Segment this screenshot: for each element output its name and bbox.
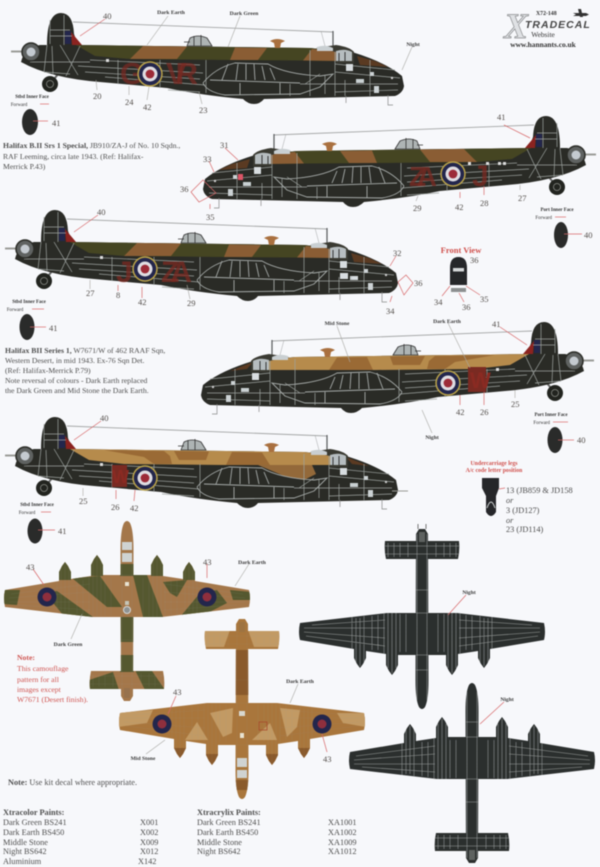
front view diagram: 36 — [462, 302, 470, 312]
callouts for aircraft 4: Mid Stone — [325, 321, 350, 327]
decal detail: port inner face, aircraft 4: Forward — [533, 421, 551, 426]
callouts for aircraft 4: 25 — [511, 399, 520, 409]
aircraft 2: side view, nose left — [203, 116, 596, 208]
callouts for aircraft 5: 25 — [79, 496, 88, 506]
logo: Xtradecal product mark: www.hannants.co.uk — [510, 40, 577, 49]
red note: camouflage pattern: images except — [17, 685, 62, 694]
paint list: Xtracrylix: XA1009 — [328, 838, 357, 847]
caption: Halifax BII Series 1 — [5, 346, 165, 395]
callouts for aircraft 3: 27 — [86, 288, 94, 298]
paint list: Xtracrylix: Dark Earth BS450 — [197, 828, 258, 837]
aircraft 3: side view, nose right: J — [116, 256, 133, 289]
callouts for aircraft 1 — [80, 10, 420, 115]
plan view C: undersurfaces, night — [299, 524, 545, 709]
callouts for aircraft 2: 42 — [455, 202, 464, 212]
red note: camouflage pattern: This camouflage — [17, 664, 69, 673]
front view diagram: 35 — [480, 294, 488, 304]
aircraft 2: side view, nose left: J — [472, 160, 489, 193]
paint list: Xtracrylix: XA1002 — [328, 828, 357, 837]
aircraft 2: side view, nose left: ZA — [409, 161, 437, 192]
paint list: Xtracrylix — [197, 808, 357, 856]
decal detail: port inner face, aircraft 2: Port Inner Face — [540, 208, 574, 213]
note: kit decal: Note: Use kit decal where appropriate. — [8, 778, 137, 787]
callouts for aircraft 3 — [74, 207, 422, 316]
plan view B callouts: 43 — [173, 687, 182, 697]
callouts for aircraft 3: 36 — [414, 278, 422, 288]
decal detail: port inner face, aircraft 2: Forward — [535, 216, 553, 221]
logo: Xtradecal product mark: TRADECAL — [525, 19, 591, 31]
decal detail: starboard inner face, aircraft 3: Stbd Inner Face — [12, 300, 47, 305]
undercarriage legs note: 13 (JB859 & JD158 — [506, 486, 573, 495]
plan view A callouts — [26, 557, 267, 648]
red note: camouflage pattern: W7671 (Desert finish). — [17, 695, 88, 704]
caption: Halifax BII Series 1: Note reversal of colours - Dark Earth replaced — [5, 376, 148, 385]
caption: Halifax B.II Srs 1 Special — [3, 141, 180, 171]
callouts for aircraft 3: 29 — [187, 298, 196, 308]
plan view B callouts — [131, 679, 332, 764]
red note: camouflage pattern: Note: — [17, 653, 35, 662]
callouts for aircraft 2: 41 — [497, 112, 506, 122]
red note: camouflage pattern — [17, 653, 88, 704]
paint list: Xtracrylix: Dark Green BS241 — [197, 818, 261, 827]
decal detail: starboard inner face, aircraft 3 — [7, 300, 58, 340]
callouts for aircraft 1: 23 — [199, 105, 208, 115]
aircraft 1: side view B.II night/earth/green, nose right: VR — [166, 56, 198, 91]
paint list: Xtracolor: Middle Stone — [3, 838, 48, 847]
undercarriage legs note: Undercarriage legs — [470, 461, 518, 467]
decal detail: starboard inner face: 41 — [52, 118, 60, 128]
callouts for aircraft 4 — [325, 319, 527, 441]
callouts for aircraft 2: 33 — [203, 154, 212, 164]
aircraft 3: side view, nose right: ZA — [161, 256, 192, 289]
caption: Halifax B.II Srs 1 Special: RAF Leeming, circa late 1943. (Ref: Halifax- — [3, 152, 144, 161]
callouts for aircraft 4: 41 — [492, 319, 500, 329]
callouts for aircraft 5 — [74, 413, 138, 513]
callouts for aircraft 2: 35 — [206, 212, 214, 222]
callouts for aircraft 4: 42 — [456, 407, 464, 417]
undercarriage legs note — [466, 461, 573, 534]
paint list: Xtracolor: X012 — [140, 847, 158, 856]
plan view B callouts: 43 — [323, 754, 332, 764]
paint list: Xtracrylix: XA1001 — [328, 818, 357, 827]
aircraft 3: side view, nose right — [5, 210, 398, 302]
decal detail: starboard inner face: Stbd Inner Face — [15, 95, 50, 100]
paint list: Xtracolor: Dark Earth BS450 — [3, 828, 64, 837]
callouts for aircraft 5: 40 — [100, 413, 108, 423]
paint list: Xtracolor: X142 — [138, 857, 156, 866]
plan view A callouts: 43 — [203, 557, 212, 567]
caption: Halifax BII Series 1: the Dark Green and Mid Stone the Dark Earth. — [5, 386, 149, 395]
callouts for aircraft 4: Dark Earth — [433, 319, 462, 325]
plan view B callouts: Mid Stone — [131, 756, 156, 762]
front view diagram: 34 — [434, 297, 443, 307]
paint list: Xtracolor — [3, 808, 158, 866]
aircraft 5: side view desert finish, nose right: W — [112, 467, 129, 487]
callouts for aircraft 1: 42 — [143, 102, 152, 112]
callouts for aircraft 2: 29 — [413, 203, 422, 213]
decal detail: port inner face, aircraft 4: 40 — [577, 435, 586, 445]
caption: Halifax BII Series 1: Western Desert, in mid 1943. Ex-76 Sqn Det. — [5, 356, 145, 365]
logo: Xtradecal product mark: X — [503, 6, 529, 46]
caption: Halifax BII Series 1: (Ref: Halifax-Merrick P.79) — [5, 366, 91, 375]
paint list: Xtracolor: Xtracolor Paints: — [3, 808, 65, 817]
decal detail: port inner face, aircraft 4: Port Inner Face — [534, 413, 568, 418]
caption: Halifax B.II Srs 1 Special: Halifax B.II Srs 1 Special, JB910/ZA-J of No. 10 Sqdn., — [3, 141, 180, 150]
undercarriage legs note: or — [506, 496, 514, 505]
paint list: Xtracolor: Night BS642 — [3, 847, 47, 856]
undercarriage legs note: or — [506, 516, 514, 525]
logo: Xtradecal product mark: X72-148 — [536, 11, 557, 17]
callouts for aircraft 3: 32 — [393, 248, 402, 258]
caption: Halifax B.II Srs 1 Special: Merrick P.43) — [3, 162, 46, 171]
callouts for aircraft 2: 36 — [180, 184, 188, 194]
plan view C callout — [448, 590, 476, 615]
decal detail: starboard inner face, aircraft 5: Stbd Inner Face — [20, 503, 55, 508]
front view diagram — [434, 245, 488, 312]
paint list: Xtracolor: X001 — [140, 818, 158, 827]
paint list: Xtracolor: Aluminium — [3, 857, 42, 866]
callouts for aircraft 2 — [180, 112, 530, 222]
aircraft 5: side view desert finish, nose right — [5, 417, 408, 509]
plan view C callout: Night — [462, 590, 476, 596]
decal detail: port inner face, aircraft 4 — [533, 413, 586, 453]
decal detail: starboard inner face — [11, 95, 60, 135]
callouts for aircraft 3: 8 — [116, 290, 120, 300]
callouts for aircraft 1: 40 — [103, 11, 112, 21]
callouts for aircraft 4: 26 — [480, 407, 488, 417]
callouts for aircraft 2: 31 — [220, 140, 228, 150]
paint list: Xtracrylix: Night BS642 — [197, 847, 241, 856]
callouts for aircraft 3: 40 — [97, 207, 106, 217]
undercarriage legs note: 3 (JD127) — [506, 506, 540, 515]
decal detail: port inner face, aircraft 2: 40 — [584, 230, 592, 240]
undercarriage legs note: 23 (JD114) — [506, 525, 543, 534]
decal detail: starboard inner face, aircraft 5: 41 — [58, 526, 66, 536]
aircraft 1: side view B.II night/earth/green, nose right — [11, 13, 404, 105]
decal detail: starboard inner face, aircraft 3: Forward — [7, 308, 24, 313]
plan view A: upper surfaces, temperate camouflage — [0, 515, 257, 705]
callouts for aircraft 2: 28 — [480, 198, 488, 208]
callouts for aircraft 1: Dark Earth — [157, 10, 186, 16]
paint list: Xtracrylix: Xtracrylix Paints: — [197, 808, 261, 817]
decal detail: starboard inner face, aircraft 3: 41 — [49, 323, 58, 333]
decal detail: starboard inner face, aircraft 5: Forward — [19, 511, 36, 516]
callouts for aircraft 3: 42 — [138, 297, 146, 307]
callouts for aircraft 1: 20 — [93, 91, 102, 101]
plan view A callouts: 43 — [26, 562, 34, 572]
plan view A callouts: Dark Earth — [238, 560, 267, 566]
callouts for aircraft 3: 34 — [386, 306, 395, 316]
plan view D: undersurfaces, night — [349, 683, 595, 863]
callouts for aircraft 2: 27 — [518, 193, 526, 203]
logo: Xtradecal product mark — [503, 6, 591, 49]
paint list: Xtracolor: X002 — [140, 828, 158, 837]
caption: Halifax BII Series 1: Halifax BII Series 1, W7671/W of 462 RAAF Sqn, — [5, 346, 165, 355]
plan view B: upper surfaces, desert camouflage — [112, 615, 372, 805]
callouts for aircraft 1: 24 — [125, 97, 134, 107]
callouts for aircraft 1: Night — [406, 42, 420, 48]
decal detail: starboard inner face, aircraft 5 — [19, 503, 66, 544]
front view diagram: Front View — [441, 245, 482, 255]
callouts for aircraft 5: 26 — [111, 502, 120, 512]
paint list: Xtracrylix: Middle Stone — [197, 838, 242, 847]
plan view A callouts: Dark Green — [54, 642, 83, 648]
red note: camouflage pattern: pattern for all — [17, 675, 59, 684]
aircraft 4: side view desert finish, nose left: W — [470, 368, 491, 393]
callouts for aircraft 4: Night — [425, 435, 439, 441]
undercarriage legs note: A/c code letter position — [466, 468, 523, 474]
plan view B callouts: Dark Earth — [286, 679, 315, 685]
plan view D callout: Night — [500, 697, 514, 703]
aircraft 4: side view desert finish, nose left — [201, 322, 594, 414]
decal detail: starboard inner face: Forward — [11, 103, 28, 108]
logo: Xtradecal product mark: Website — [531, 30, 556, 39]
front view diagram: 36 — [470, 255, 478, 265]
paint list: Xtracolor: X009 — [140, 838, 158, 847]
plan view D callout — [480, 697, 514, 724]
paint list: Xtracrylix: XA1012 — [328, 847, 357, 856]
aircraft 1: side view B.II night/earth/green, nose right: G — [120, 56, 144, 91]
callouts for aircraft 5: 42 — [130, 503, 138, 513]
decal detail: port inner face, aircraft 2 — [535, 208, 592, 248]
callouts for aircraft 1: Dark Green — [230, 11, 259, 17]
paint list: Xtracolor: Dark Green BS241 — [3, 818, 67, 827]
